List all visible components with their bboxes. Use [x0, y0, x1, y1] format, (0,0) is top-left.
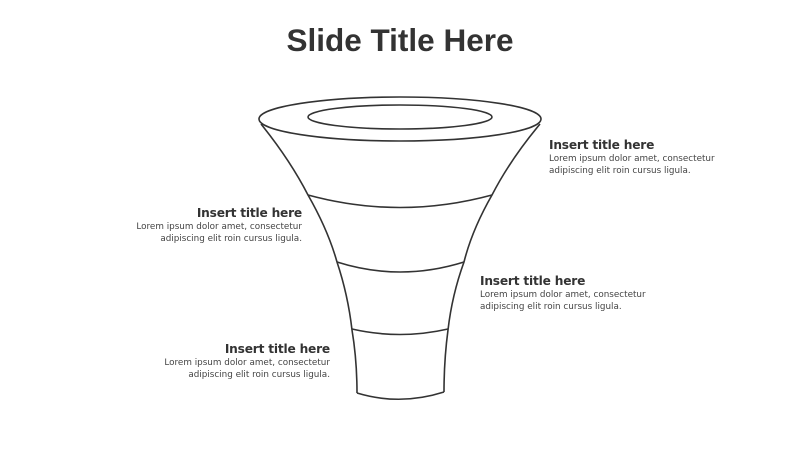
text block 1 right: Insert title here [549, 138, 654, 152]
text block 3 right: Insert title here [480, 274, 585, 288]
funnel top rim [259, 97, 541, 141]
text block 1 right: Lorem ipsum dolor amet, consectetur [549, 154, 715, 164]
text block 4 left: adipiscing elit roin cursus ligula. [188, 370, 330, 380]
text block 2 left: Insert title here [197, 206, 302, 220]
text block 2 left: Lorem ipsum dolor amet, consectetur [136, 222, 302, 232]
text block 2 left: adipiscing elit roin cursus ligula. [160, 234, 302, 244]
text block 4 left: Lorem ipsum dolor amet, consectetur [164, 358, 330, 368]
text block 4 left: Insert title here [225, 342, 330, 356]
text block 2 left [136, 206, 302, 244]
text block 3 right [480, 274, 646, 312]
funnel body [261, 124, 540, 399]
title: Slide Title Here [286, 22, 514, 58]
text block 1 right [549, 138, 715, 176]
text block 3 right: adipiscing elit roin cursus ligula. [480, 302, 622, 312]
text block 3 right: Lorem ipsum dolor amet, consectetur [480, 290, 646, 300]
text block 4 left [164, 342, 330, 380]
text block 1 right: adipiscing elit roin cursus ligula. [549, 166, 691, 176]
